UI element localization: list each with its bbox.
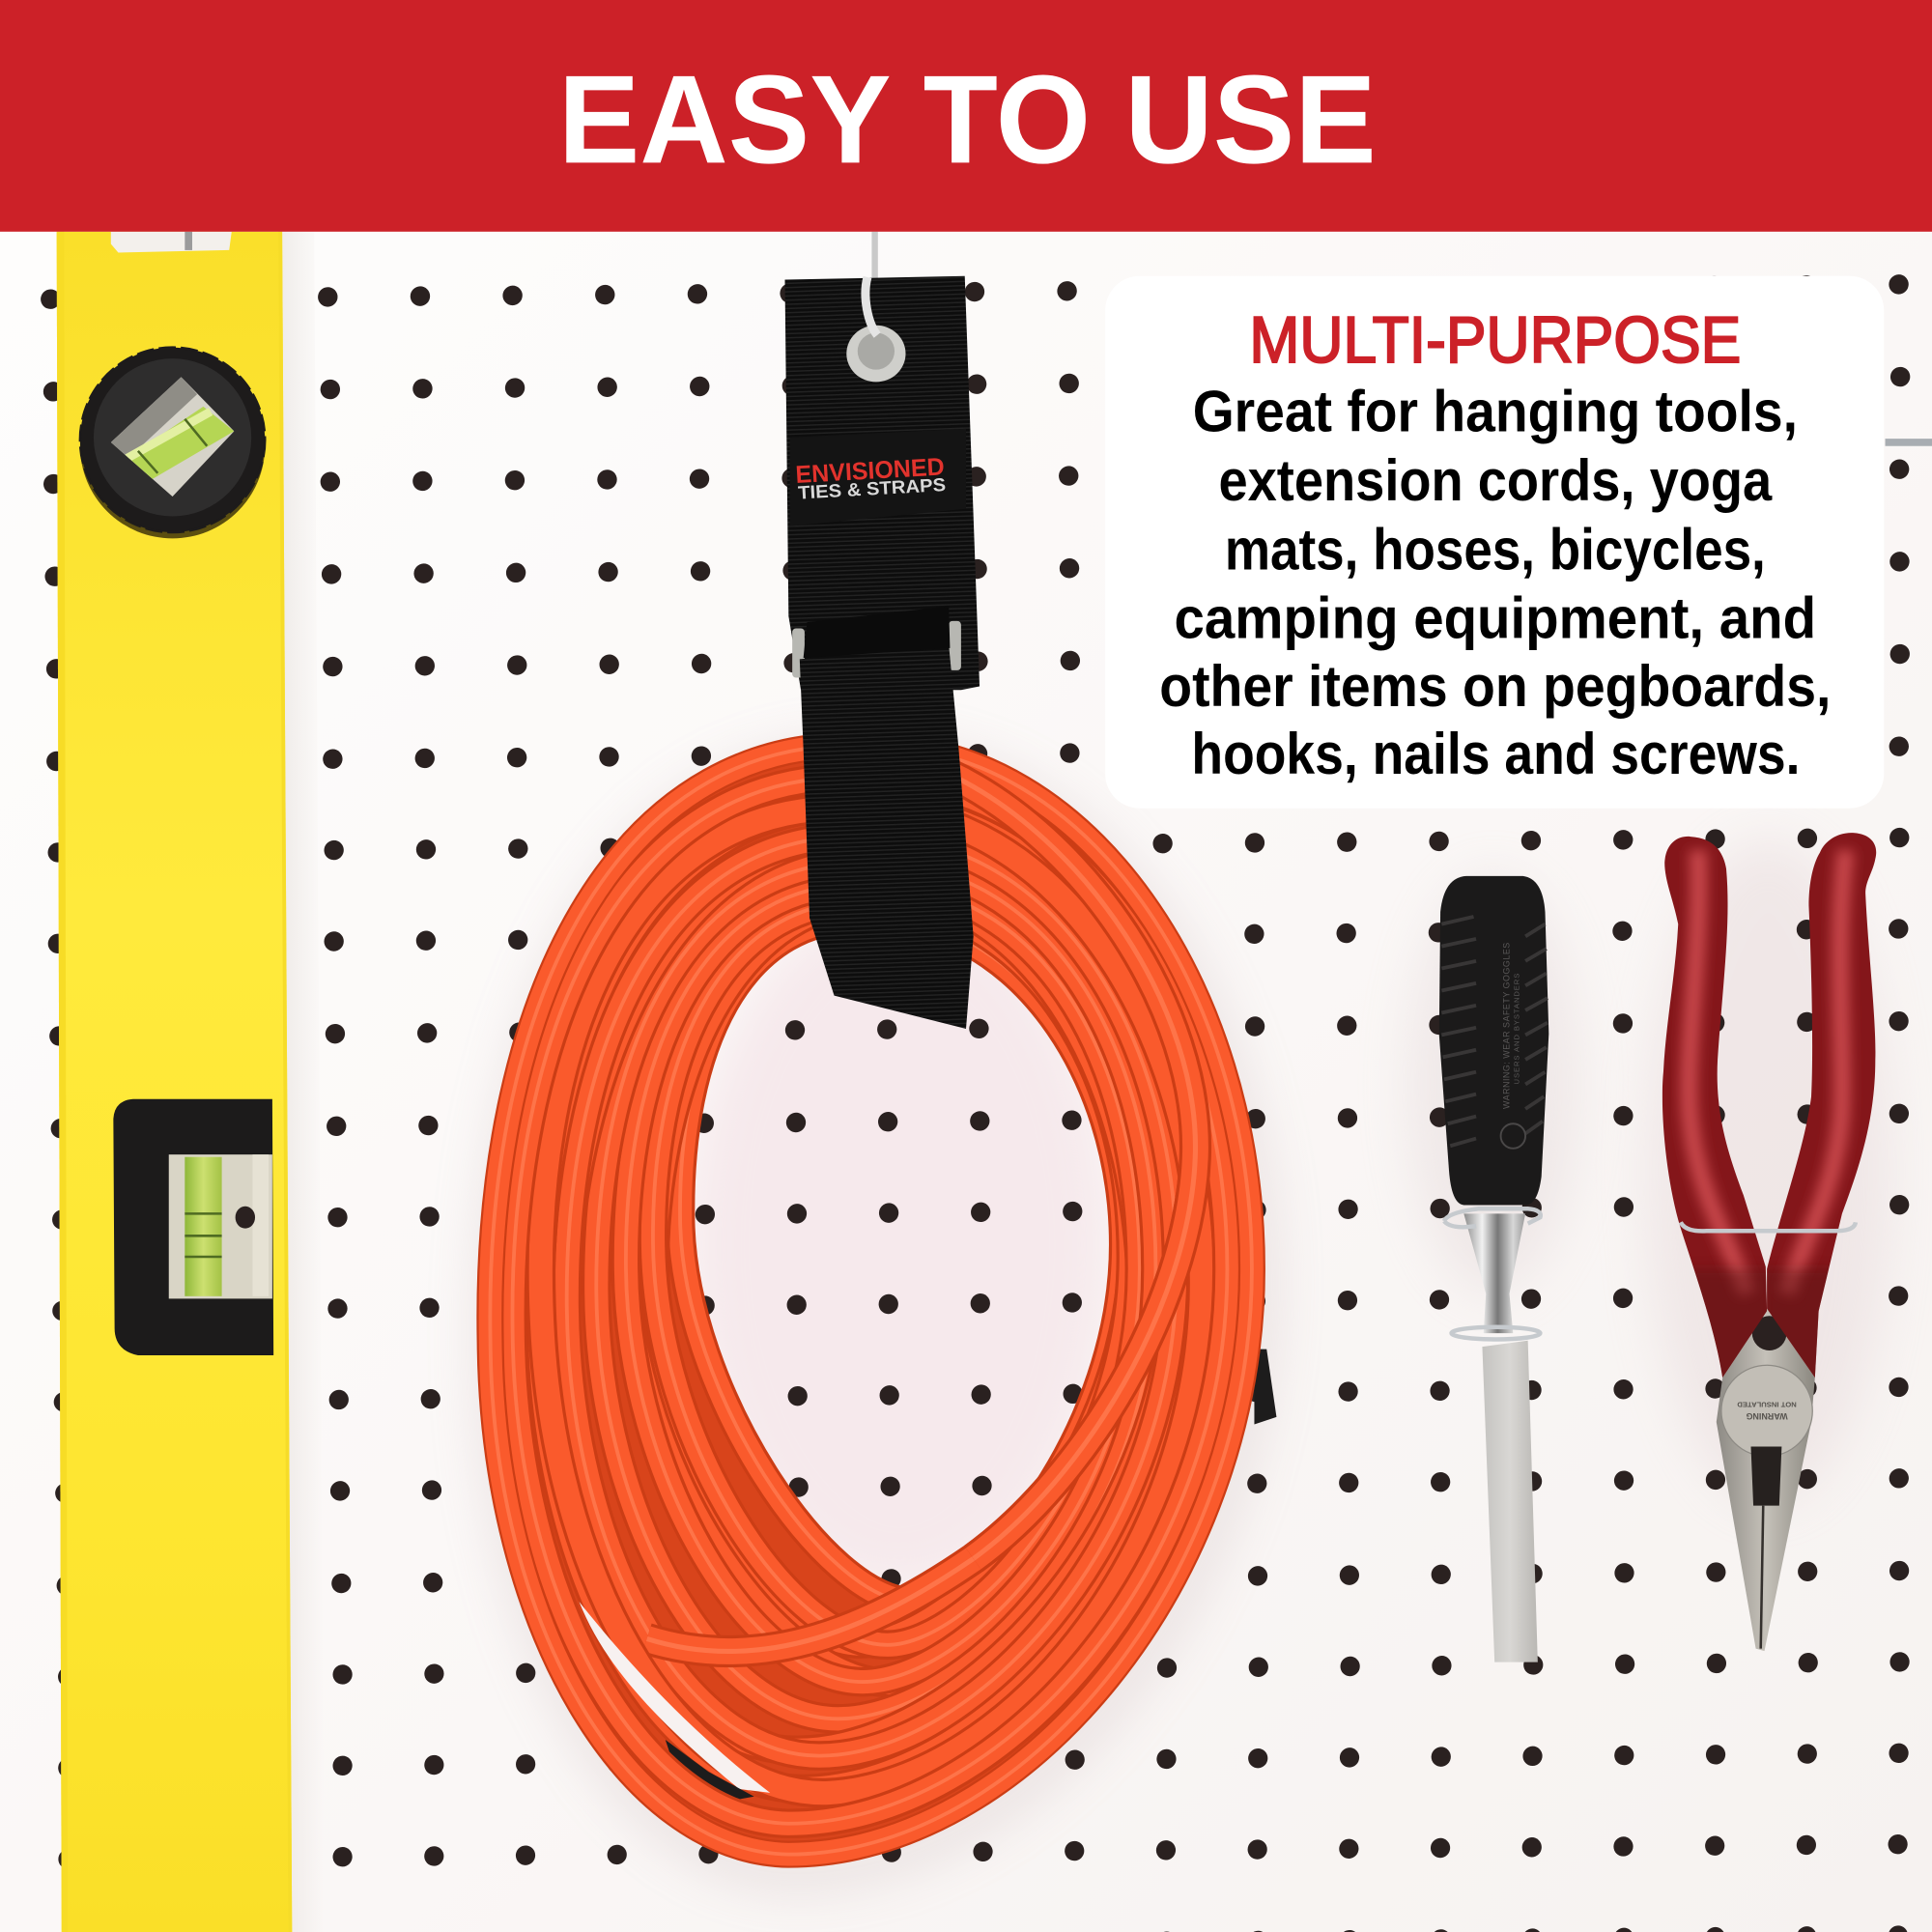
black handle: USERS AND BYSTANDERS [1513,974,1521,1084]
rectangular vial [113,1099,273,1355]
black handle: WARNING: WEAR SAFETY GOGGLES [1502,943,1512,1109]
left handle [1662,837,1767,1378]
black hanging strap [784,232,980,1029]
plug behind coil right [1254,1350,1276,1424]
velcro band [804,607,950,658]
right side peg hook [1886,439,1932,446]
pliers [1651,826,1886,1651]
grommet and hook loop [846,277,906,382]
wire holder upper [1444,1208,1541,1227]
card body text: mats, hoses, bicycles, [1225,517,1766,582]
brand label [790,429,966,526]
card heading: MULTI-PURPOSE [1249,304,1741,377]
metal hook [872,232,877,296]
strap buckle left [792,629,805,678]
header banner [0,0,1932,232]
wire holder [1681,1222,1856,1231]
level notch [111,232,232,252]
callout card: multi-purpose [1105,276,1884,809]
wire holder lower [1452,1327,1540,1339]
card body text [1159,379,1831,786]
silver head: WARNING [1746,1411,1788,1421]
soft shadows on pegboard [495,760,1891,1869]
upper strap [784,276,980,690]
yellow spirit level [57,232,324,1932]
silver head [1717,1309,1815,1651]
strap buckle right [949,621,961,670]
brand label: TIES & STRAPS [798,475,947,504]
round vial [80,348,265,538]
black handle [1439,876,1548,1205]
silver head: NOT INSULATED [1737,1401,1797,1409]
gap between coil loops with plug [579,1602,770,1802]
lower strap [800,644,974,1029]
hook in notch [185,232,192,250]
title: EASY TO USE [558,48,1377,189]
metal ferrule [1463,1213,1525,1333]
brand label: ENVISIONED [795,453,945,489]
card body text: Great for hanging tools, [1193,379,1798,443]
card body text: extension cords, yoga [1218,448,1773,513]
card body text: hooks, nails and screws. [1191,722,1801,786]
screwdriver [1439,876,1548,1662]
blade [1482,1341,1538,1662]
right handle [1767,833,1876,1378]
orange extension cord coil [490,746,1276,1855]
card body text: other items on pegboards, [1159,654,1831,719]
card body text: camping equipment, and [1175,586,1816,651]
coil base fill [490,746,1252,1855]
